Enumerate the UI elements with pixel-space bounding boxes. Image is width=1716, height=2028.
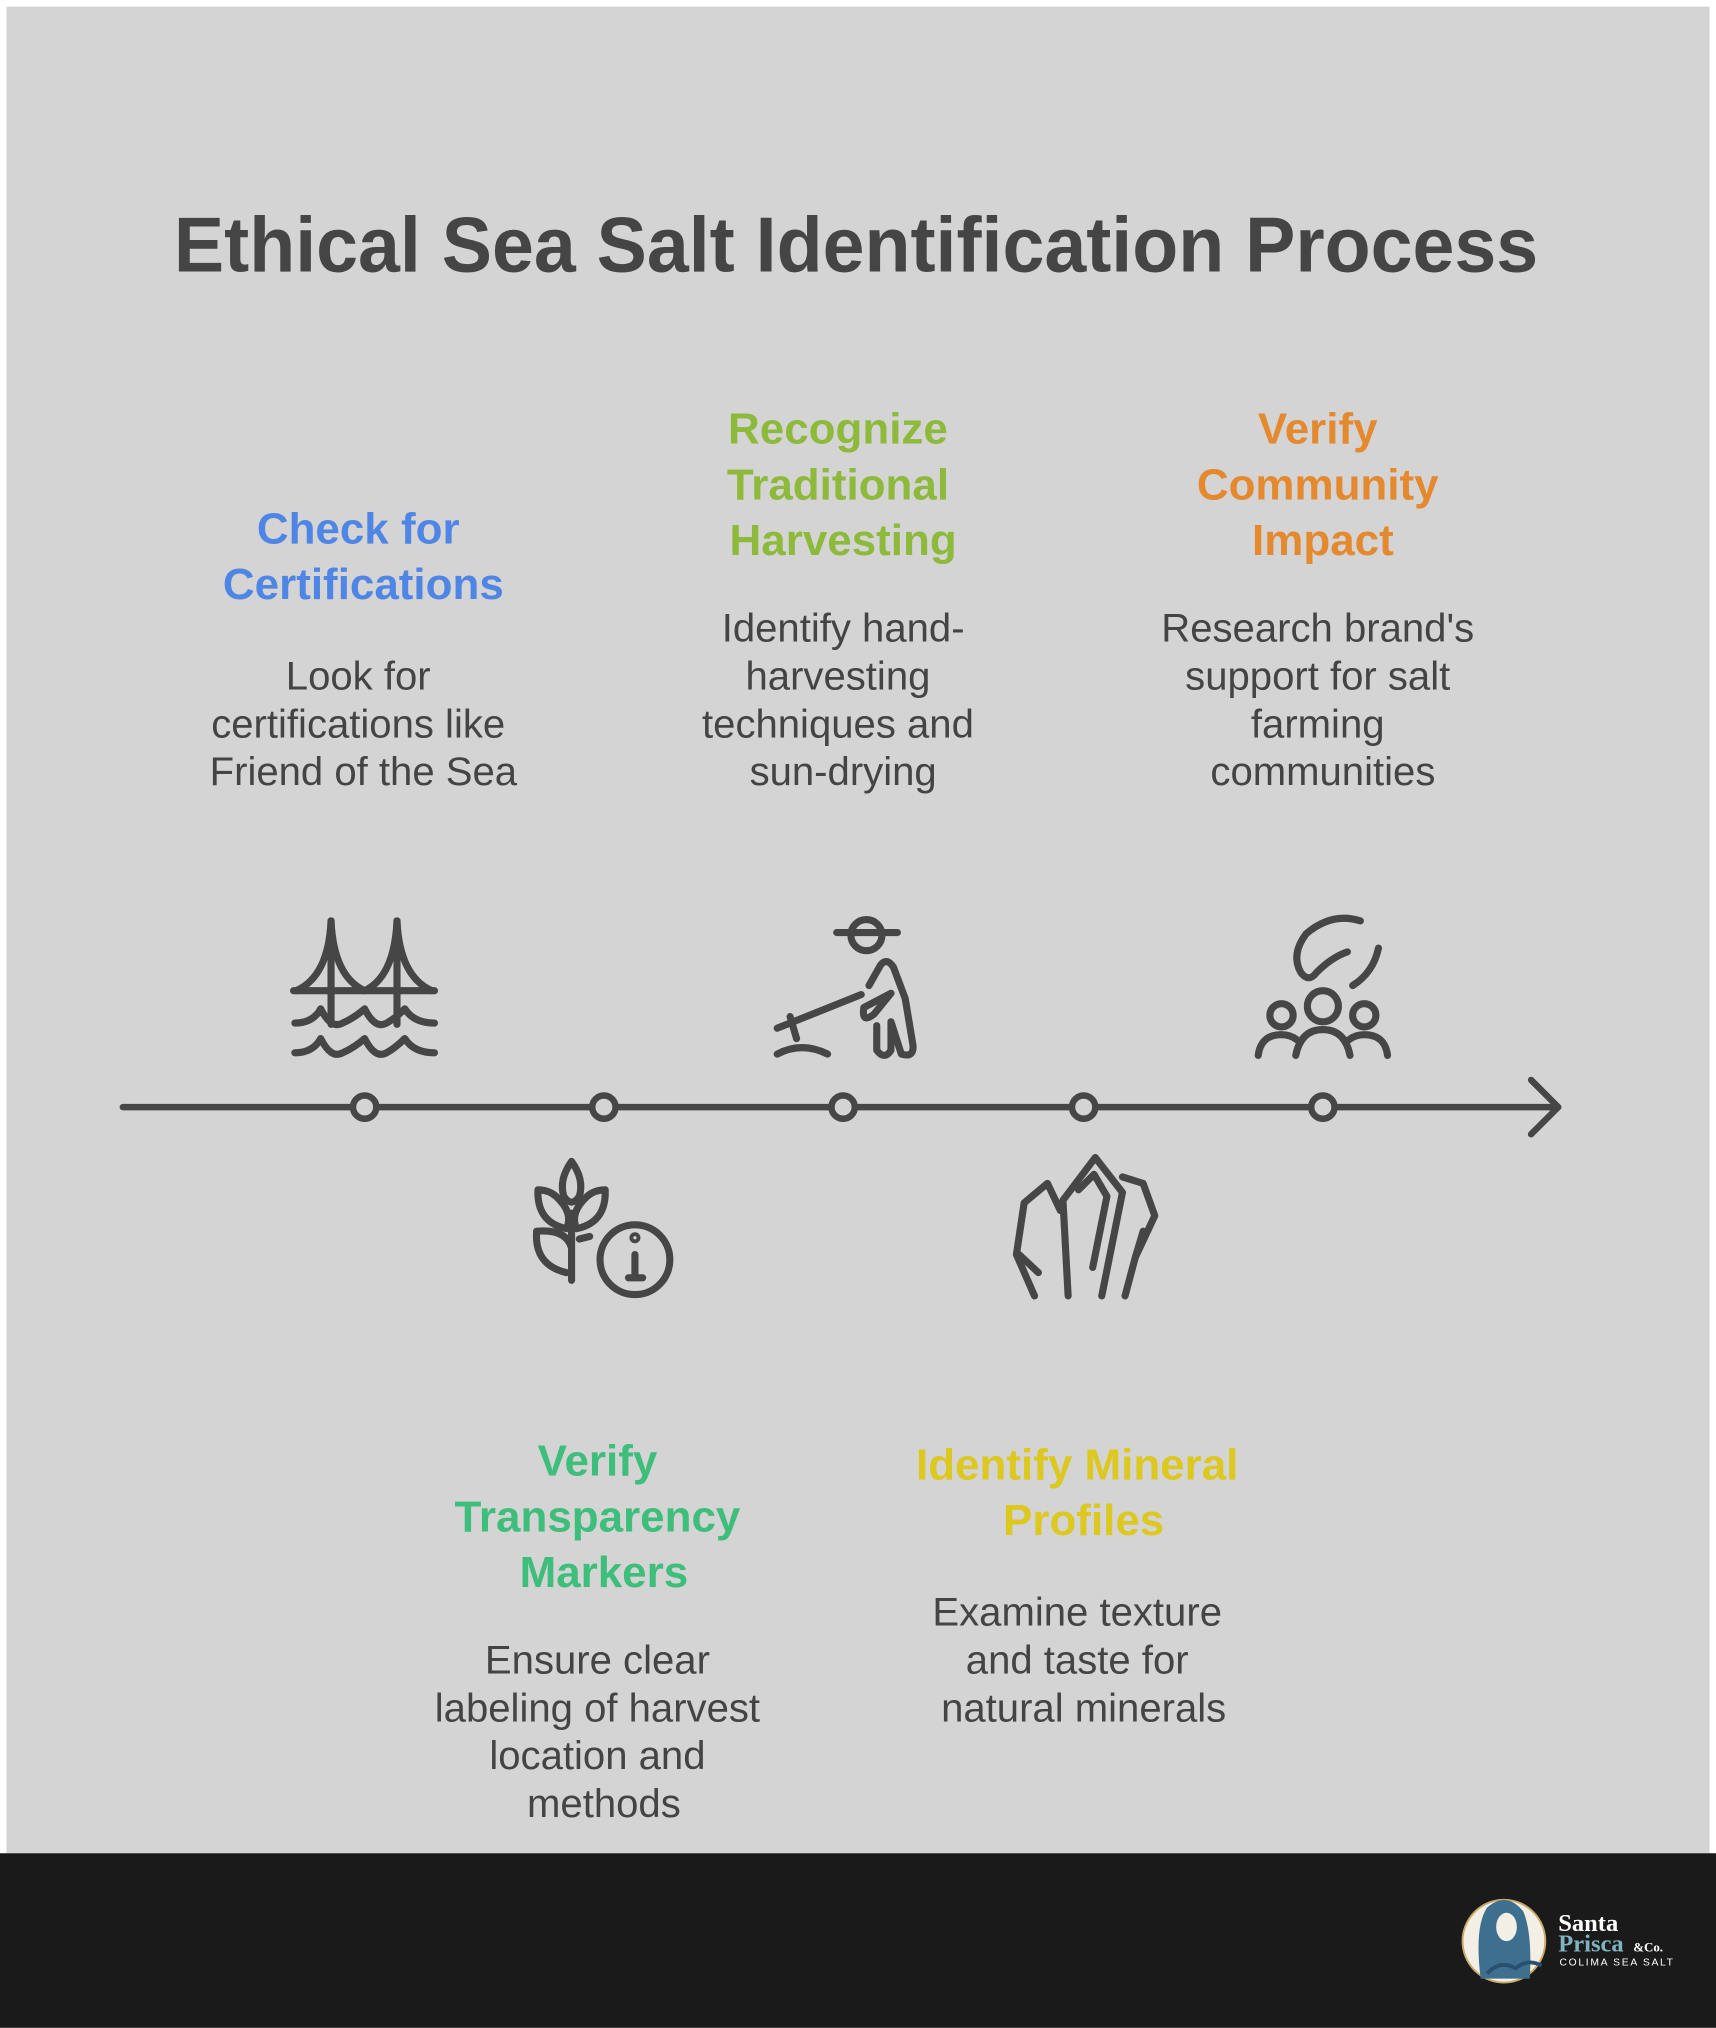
- step 5 heading: Verify Community Impact: Community: [1197, 460, 1439, 509]
- icon: wheat with info: [536, 1161, 670, 1295]
- step 5 heading: Verify Community Impact: [1197, 405, 1439, 565]
- step 5 body: communities: [1210, 750, 1435, 794]
- step 4 heading: Identify Mineral Profiles: Identify Mineral: [916, 1441, 1238, 1490]
- step 4 heading: Identify Mineral Profiles: Profiles: [1003, 1496, 1164, 1545]
- step 3 heading: Recognize Traditional Harvesting: Recognize: [728, 405, 948, 454]
- step 3 heading: Recognize Traditional Harvesting: [727, 405, 957, 565]
- step 2 body: methods: [527, 1782, 681, 1826]
- step 4 body: Examine texture: [932, 1591, 1222, 1635]
- step 3 body: Identify hand-: [722, 607, 965, 651]
- step 5 body: support for salt: [1185, 654, 1450, 698]
- step 4 heading: Identify Mineral Profiles: [916, 1441, 1238, 1545]
- step 4 body: [932, 1591, 1226, 1730]
- step 5 body: Research brand's: [1161, 607, 1474, 651]
- step 2 body: labeling of harvest: [435, 1686, 760, 1730]
- step 1 heading: Check for Certifications: Certifications: [223, 560, 504, 609]
- step 1 body: Friend of the Sea: [210, 750, 518, 794]
- step 3 body: [702, 607, 974, 794]
- step 3 heading: Recognize Traditional Harvesting: Traditional: [727, 460, 949, 509]
- title: Ethical Sea Salt Identification Process: [174, 203, 1538, 289]
- step 2 body: [435, 1639, 760, 1826]
- step 2 body: location and: [489, 1734, 706, 1778]
- step 1 heading: Check for Certifications: Check for: [257, 504, 460, 553]
- step 1 body: [210, 654, 518, 794]
- step 5 body: farming: [1251, 702, 1385, 746]
- footer logo: Santa Prisca & Co.: Prisca: [1558, 1931, 1624, 1958]
- step 3 body: harvesting: [745, 654, 930, 698]
- timeline arrow: [123, 1080, 1558, 1134]
- step 1 body: Look for: [286, 654, 431, 698]
- step 2 heading: Verify Transparency Markers: [455, 1437, 741, 1597]
- step 5 heading: Verify Community Impact: Impact: [1252, 516, 1394, 565]
- icon: farmer with hoe: [777, 920, 913, 1055]
- step 1 body: certifications like: [211, 702, 505, 746]
- step 4 body: and taste for: [966, 1639, 1189, 1683]
- step 5 body: [1161, 607, 1474, 794]
- footer logo: Santa Prisca & Co.: COLIMA SEA SALT: [1560, 1958, 1675, 1969]
- step 3 body: sun-drying: [750, 750, 937, 794]
- footer bar: [0, 1853, 1716, 2028]
- step 2 body: Ensure clear: [485, 1639, 710, 1683]
- icon: bridge over water: [294, 921, 434, 1054]
- step 5 heading: Verify Community Impact: Verify: [1258, 405, 1378, 454]
- step 4 body: natural minerals: [941, 1686, 1226, 1730]
- icon: community with hand: [1258, 918, 1388, 1055]
- footer logo: Santa Prisca & Co.: [1463, 1900, 1675, 1983]
- step 1 heading: Check for Certifications: [223, 504, 504, 609]
- step 2 heading: Verify Transparency Markers: Markers: [520, 1548, 688, 1597]
- footer logo: Santa Prisca & Co.: &Co.: [1633, 1940, 1663, 1955]
- step 2 heading: Verify Transparency Markers: Verify: [538, 1437, 658, 1486]
- footer logo: Santa Prisca & Co.: Santa: [1558, 1910, 1618, 1937]
- step 2 heading: Verify Transparency Markers: Transparency: [455, 1492, 741, 1541]
- step 3 body: techniques and: [702, 702, 974, 746]
- icon: salt crystals: [1016, 1158, 1155, 1296]
- step 3 heading: Recognize Traditional Harvesting: Harvesting: [730, 516, 957, 565]
